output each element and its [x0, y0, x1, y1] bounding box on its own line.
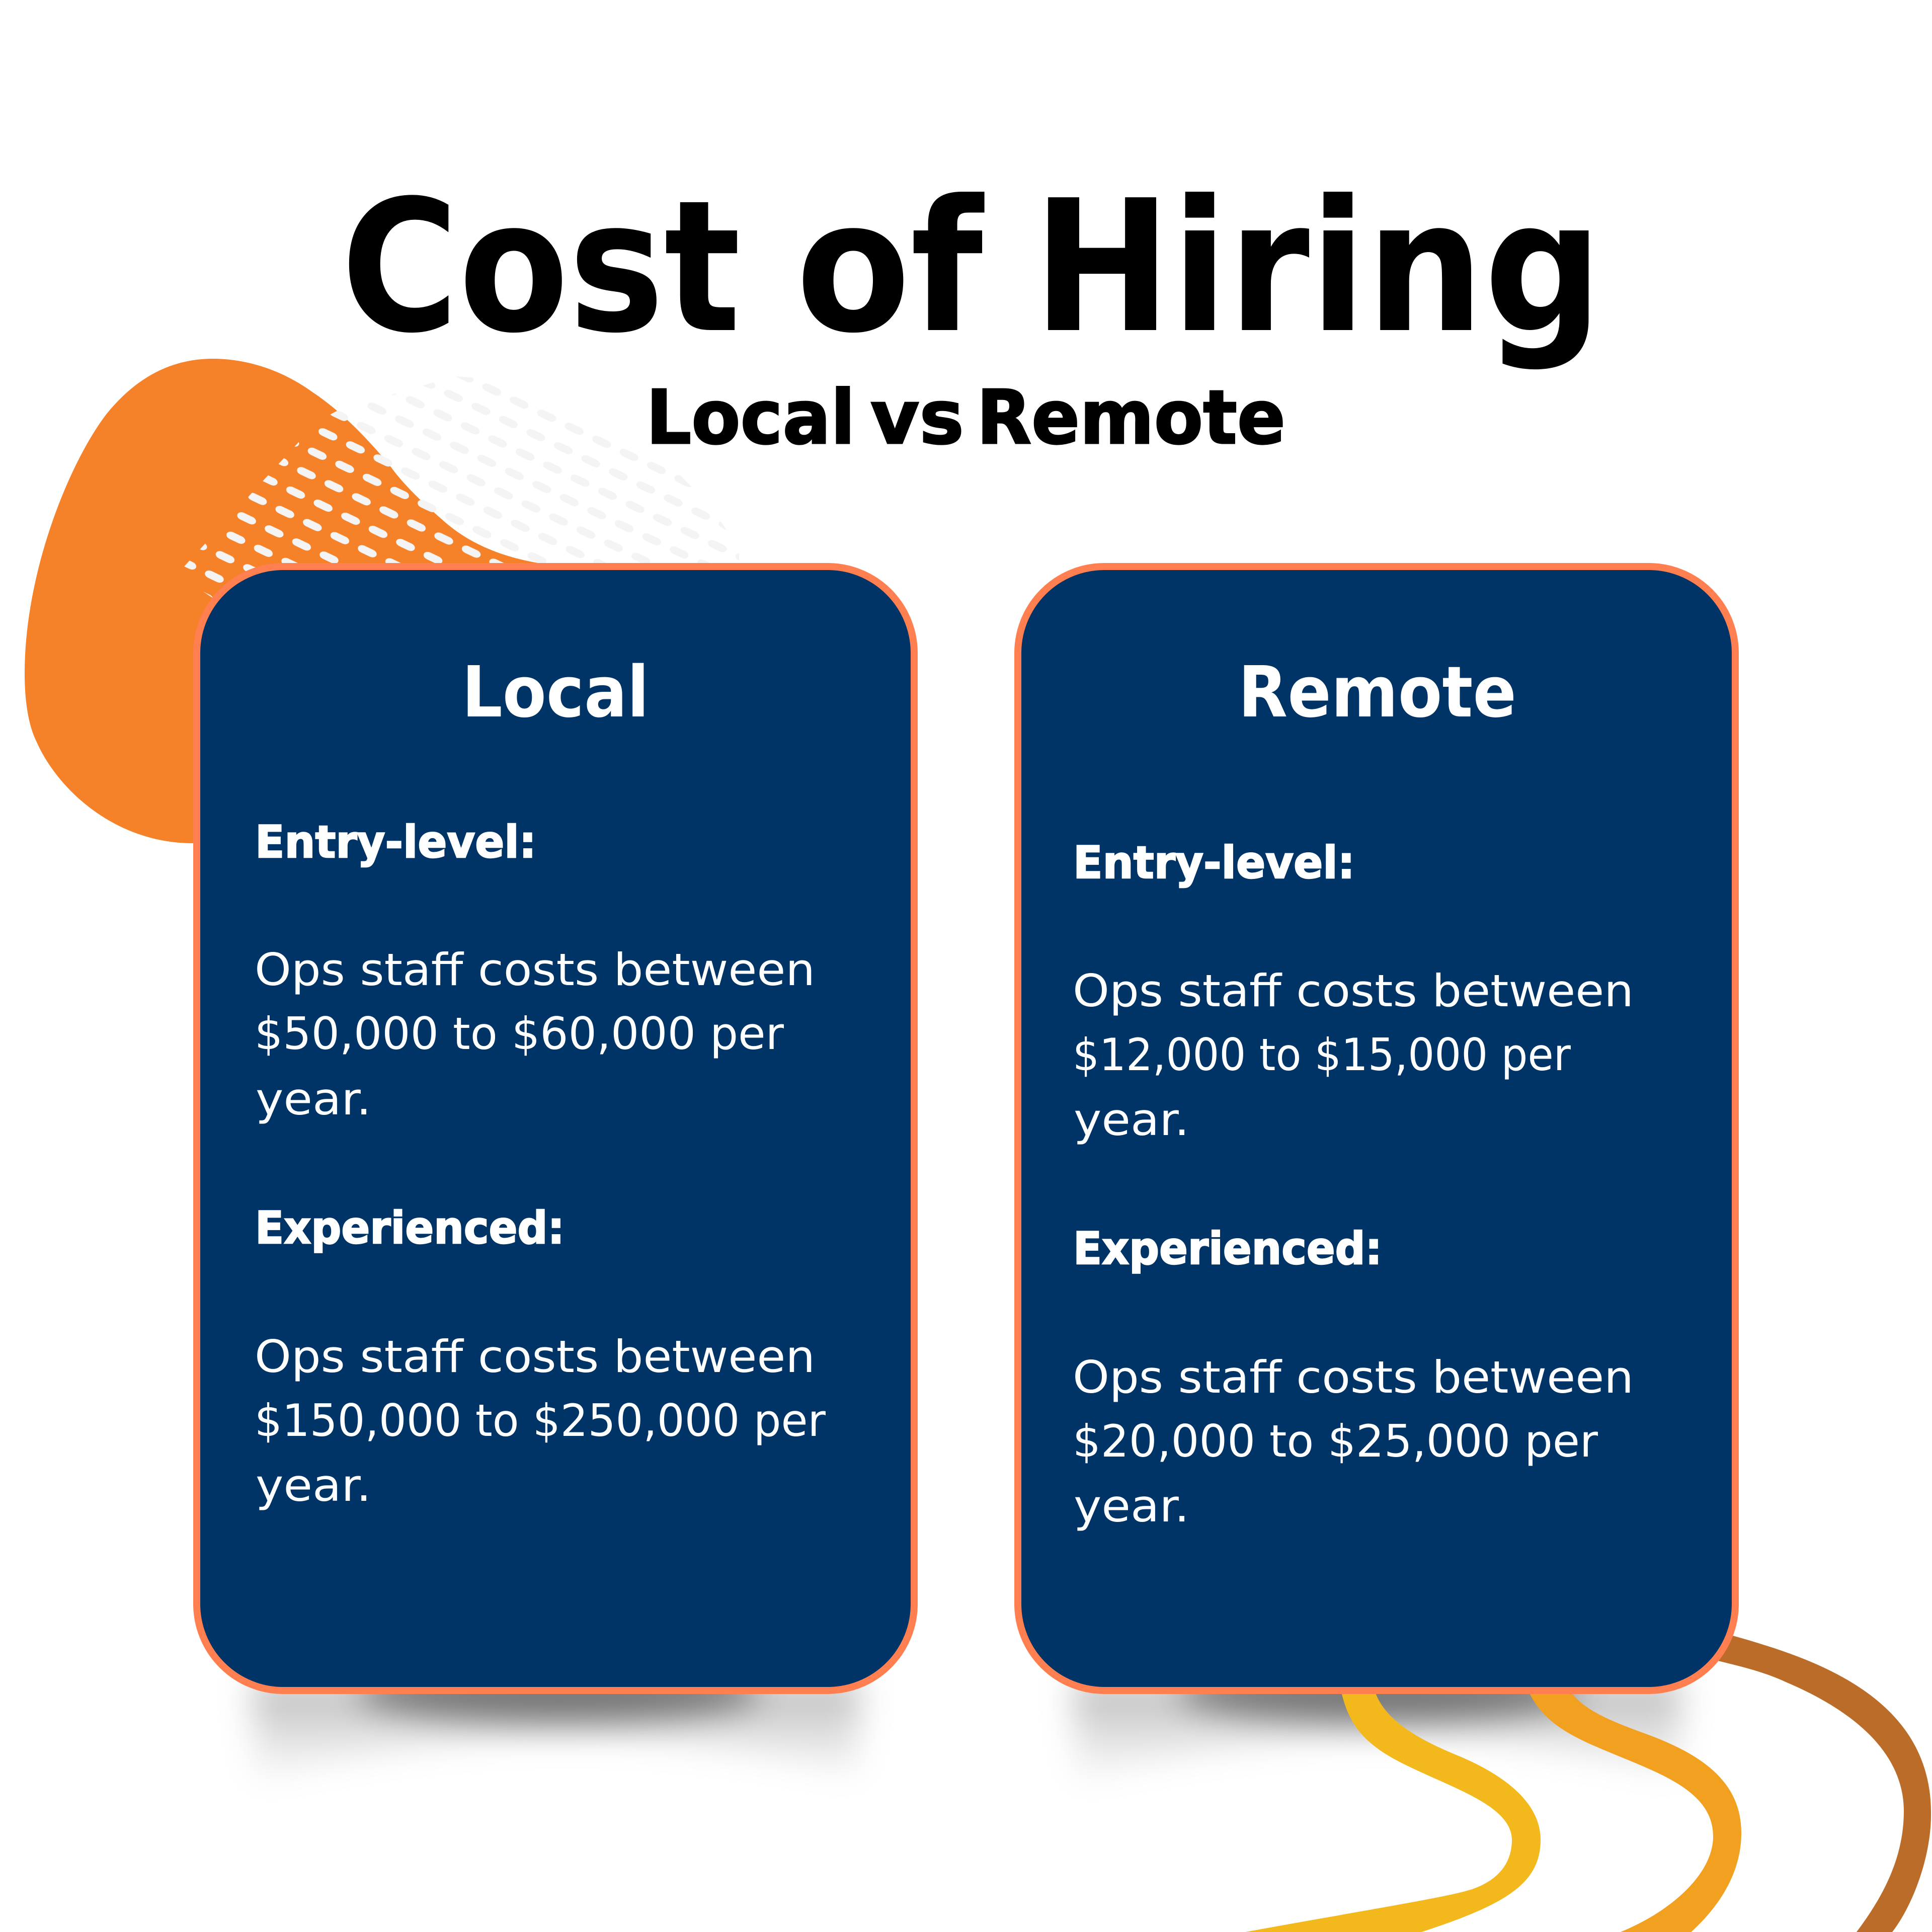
text: experienced cost: $150,000 to $250,000 per [255, 1395, 826, 1446]
label: entry-level: Entry-level: [1073, 837, 1355, 889]
shadow under remote card [1073, 1661, 1682, 1781]
label: experienced: Experienced: [1073, 1223, 1382, 1274]
title: Cost [341, 162, 796, 373]
halftone dash pattern [184, 376, 739, 598]
ribbon: orange [1524, 1680, 1741, 1932]
text: experienced cost: Ops staff costs between [255, 1331, 815, 1383]
text: experienced cost: year. [256, 1460, 371, 1511]
panel: remote [1018, 567, 1735, 1691]
decorative ribbons [1228, 1628, 1931, 1932]
background orange blob [25, 359, 553, 843]
heading: remote: Remote [1238, 652, 1516, 734]
ribbon: yellow [1228, 1680, 1541, 1932]
text: experienced cost: year. [1074, 1480, 1189, 1532]
subtitle: vs [870, 374, 990, 461]
text: entry-level cost: $50,000 to $60,000 per [255, 1008, 784, 1060]
text: entry-level cost [255, 944, 815, 1125]
text: entry-level cost: Ops staff costs between [1073, 965, 1634, 1017]
subtitle: Local [646, 374, 880, 461]
text: entry-level cost: $12,000 to $15,000 per [1073, 1029, 1571, 1081]
panel: local [197, 567, 914, 1691]
label: entry-level: Entry-level: [255, 816, 536, 868]
text: experienced cost: $20,000 to $25,000 per [1073, 1415, 1598, 1467]
text: entry-level cost: year. [256, 1073, 371, 1125]
heading: local: Local [462, 652, 649, 734]
card background [197, 567, 914, 1691]
title: of [796, 162, 1041, 373]
text: entry-level cost: Ops staff costs between [255, 944, 815, 996]
subtitle: Remote [977, 374, 1285, 461]
text: entry-level cost: year. [1074, 1094, 1189, 1146]
label: experienced: Experienced: [255, 1202, 565, 1254]
text: experienced cost [1073, 1351, 1634, 1532]
text: experienced cost: Ops staff costs between [1073, 1351, 1634, 1403]
title: Hiring [1033, 162, 1602, 373]
shadow under local card [252, 1661, 861, 1781]
ribbon: brown [1696, 1628, 1931, 1932]
text: entry-level cost [1073, 965, 1634, 1146]
card background [1018, 567, 1735, 1691]
text: experienced cost [255, 1331, 826, 1511]
